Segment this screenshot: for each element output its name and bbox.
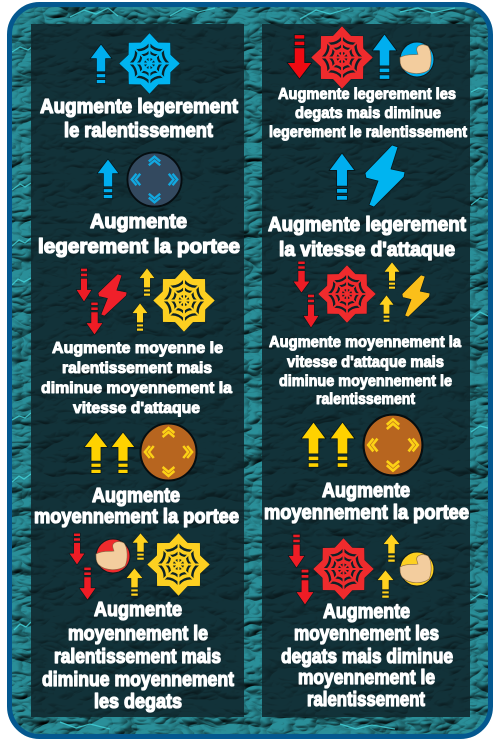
icon: red down arrow: [288, 534, 305, 568]
text: attack speed versus slow: Augmente moyennement la: [269, 334, 461, 351]
text: slow description: le ralentissement: [64, 120, 213, 142]
text: range description: legerement la portee: [38, 236, 240, 258]
icon: red down arrow: [86, 302, 103, 335]
text: damage versus slow: Augmente: [323, 601, 410, 623]
text: damage versus slow: moyennement le: [298, 667, 435, 689]
text: attack speed versus slow: vitesse d'attaque mais: [287, 354, 444, 371]
icon: red down arrow: [293, 261, 310, 293]
text: damage versus slow: ralentissement: [307, 689, 425, 711]
icon: yellow up arrow: [384, 262, 400, 289]
icon: yellow up arrow: [111, 432, 135, 473]
icon: yellow up arrow: [139, 268, 155, 296]
icon: red down arrow: [287, 35, 312, 79]
panel: left column: [31, 24, 244, 717]
icon: yellow up arrow: [126, 568, 143, 596]
text: attack speed description: la vitesse d'attaque: [279, 239, 455, 261]
text: damage versus slow: [281, 601, 453, 711]
icon: blue up arrow: [372, 34, 397, 79]
text: slow versus attack speed: [41, 340, 232, 417]
icon: yellow up arrow: [330, 422, 355, 467]
panel: right column: [262, 24, 470, 717]
text: damage versus slow: Augmente legerement les: [278, 86, 456, 103]
text: damage versus slow: degats mais diminue: [281, 646, 453, 668]
item: medium attack speed, less slow: [269, 261, 461, 408]
icon: yellow lightning: [402, 275, 430, 317]
text: damage versus slow: [269, 86, 468, 141]
icon: blue up arrow: [97, 159, 119, 199]
icon: yellow up arrow: [383, 534, 400, 562]
text: slow description: Augmente legerement: [40, 96, 238, 118]
icon: blue lightning: [365, 145, 405, 207]
icon: yellow muscle: [400, 552, 434, 586]
icon: red down arrow: [303, 294, 319, 328]
text: damage versus slow: degats mais diminue: [295, 105, 441, 122]
icon: red web: [311, 26, 373, 89]
icon: yellow up arrow: [301, 422, 326, 467]
icon: yellow web: [153, 269, 215, 332]
text: slow versus damage: moyennement le: [68, 623, 208, 645]
text: range description: Augmente: [90, 211, 187, 233]
item: medium slow, less damage: [42, 533, 234, 713]
text: medium range description: moyennement la portee: [34, 506, 239, 528]
text: attack speed versus slow: [269, 334, 461, 408]
text: medium range description: Augmente: [322, 480, 410, 502]
text: slow description: [40, 96, 238, 142]
text: medium range description: [34, 485, 239, 528]
text: slow versus attack speed: ralentissement mais: [62, 360, 212, 377]
item: more damage, less slow: [269, 26, 468, 141]
icon: red down arrow: [69, 533, 85, 565]
item: slightly increases attack speed: [268, 145, 466, 261]
text: medium range description: moyennement la portee: [264, 502, 469, 524]
item: slightly increases range: [38, 152, 240, 258]
icon: red web: [313, 538, 374, 600]
item: medium range: [34, 424, 239, 528]
icon: orange range circle: [140, 424, 197, 480]
text: slow versus damage: les degats: [94, 691, 182, 713]
text: attack speed versus slow: diminue moyennement le: [279, 373, 452, 390]
text: slow versus attack speed: vitesse d'attaque: [73, 400, 200, 417]
text: slow versus attack speed: Augmente moyenne le: [52, 340, 223, 357]
icon: yellow up arrow: [132, 303, 148, 331]
icon: orange range circle: [364, 415, 422, 475]
text: medium range description: Augmente: [92, 485, 180, 507]
text: damage versus slow: legerement le ralentissement: [269, 124, 468, 141]
text: attack speed versus slow: ralentissement: [316, 391, 416, 408]
icon: yellow up arrow: [84, 432, 108, 473]
icon: blue web: [119, 33, 180, 94]
icon: yellow up arrow: [132, 533, 149, 560]
icon: blue up arrow: [329, 153, 355, 200]
icon: blue muscle: [400, 42, 434, 77]
item: medium slow, less attack speed: [41, 268, 232, 417]
text: attack speed description: [268, 214, 466, 261]
icon: red web: [318, 265, 376, 323]
text: medium range description: [264, 480, 469, 524]
icon: blue range circle: [127, 152, 182, 207]
icon: red down arrow: [79, 567, 96, 600]
text: slow versus damage: Augmente: [94, 599, 182, 621]
icon: yellow up arrow: [377, 570, 394, 598]
text: damage versus slow: moyennement les: [294, 623, 439, 645]
icon: red muscle: [96, 539, 130, 573]
item: medium range: [264, 415, 469, 524]
icon: red down arrow: [296, 569, 314, 605]
text: slow versus damage: diminue moyennement: [42, 669, 234, 691]
icon: yellow up arrow: [379, 295, 394, 322]
text: attack speed description: Augmente legerement: [268, 214, 466, 236]
text: slow versus attack speed: diminue moyennement la: [41, 380, 232, 397]
text: slow versus damage: [42, 599, 234, 713]
icon: blue up arrow: [90, 44, 112, 84]
item: medium damage, less slow: [281, 534, 453, 711]
text: slow versus damage: ralentissement mais: [54, 646, 221, 668]
icon: yellow web: [147, 533, 210, 596]
icon: red lightning: [98, 274, 127, 316]
item: slightly increases slow: [40, 33, 238, 142]
text: range description: [38, 211, 240, 258]
icon: red down arrow: [76, 268, 92, 302]
